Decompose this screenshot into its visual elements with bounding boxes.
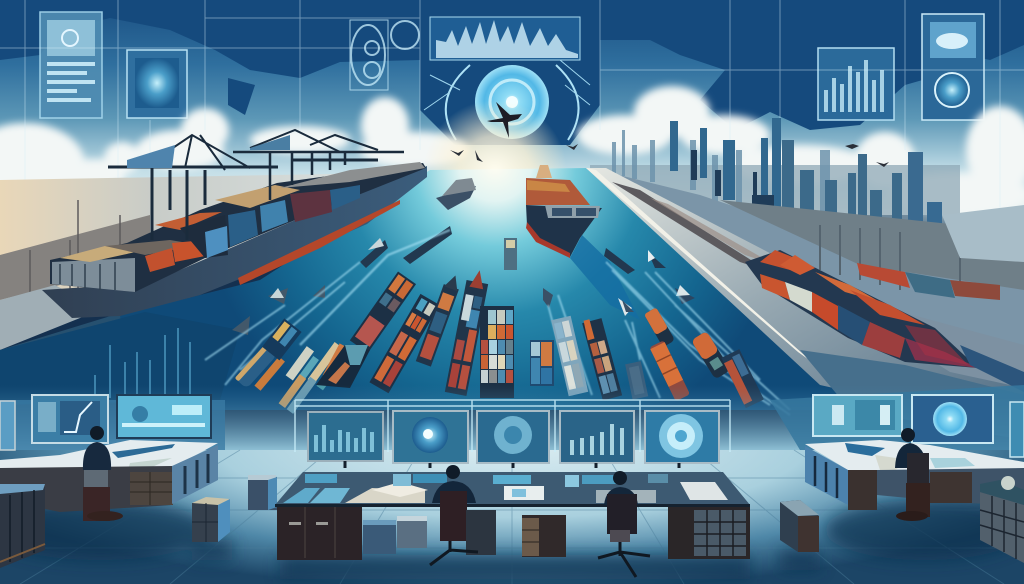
left barge: pale and teal [286, 346, 321, 386]
left monitors [0, 395, 211, 450]
ship shadow on water [570, 235, 640, 320]
left barge: blue boat [235, 344, 277, 389]
panel: central waveform chart [430, 17, 580, 60]
boat J2 [649, 340, 690, 401]
operator center right [598, 471, 650, 577]
left barge: dark and yellow [262, 318, 302, 360]
right monitors [813, 395, 1024, 457]
barge B [369, 294, 440, 393]
panel: bar chart screen right [818, 48, 894, 120]
operator left [83, 426, 123, 521]
monitor: left wide [117, 395, 211, 438]
monitor: right glowing orb [912, 395, 993, 443]
left harbour cranes [108, 130, 404, 240]
left container ship [42, 162, 427, 318]
distant cargo ship [436, 178, 476, 210]
boat J1 [644, 307, 675, 347]
left barge: tan and steel [279, 371, 317, 414]
cabinet right [980, 476, 1024, 563]
container stack F [530, 340, 554, 386]
left desk cabinet [277, 507, 362, 560]
floor [0, 450, 1024, 584]
back wall behind monitors [0, 385, 1024, 455]
left shore haze [0, 172, 440, 300]
barge D [445, 268, 490, 396]
barge I [625, 361, 648, 400]
operator right [895, 428, 930, 521]
panel: top right cloud and gauge screen [922, 14, 984, 120]
right land behind quay [590, 168, 1024, 420]
lower left dark water with data bars [0, 312, 240, 405]
container stack E [480, 306, 514, 398]
monitor: center 2 eye [393, 411, 468, 468]
right desk cabinet [668, 507, 750, 559]
monitor: center 3 eye [477, 411, 549, 468]
holographic dashboard panels [40, 12, 984, 140]
center drawer unit [522, 515, 566, 557]
center console desk [275, 465, 750, 577]
monitor: center 5 radar [645, 411, 719, 468]
birds [450, 144, 889, 167]
central container ship [526, 165, 602, 258]
panel: radar screen [127, 50, 187, 118]
scaffold yard behind containers [720, 200, 1024, 290]
monitor: right chart [813, 395, 902, 436]
clouds [0, 86, 1024, 217]
left barge: orange [323, 343, 349, 380]
barge A [350, 272, 416, 353]
floor shadows under desks [0, 500, 1024, 579]
monitor: center 1 chart [308, 412, 383, 468]
center distant ships [232, 165, 695, 335]
crate right [780, 500, 819, 552]
monitor: far left [0, 401, 15, 450]
crate near left desk [248, 475, 277, 510]
desk papers and tablets [283, 474, 728, 503]
crate left [192, 497, 230, 542]
side room walls [0, 385, 1024, 465]
monitor: left line chart [32, 395, 108, 443]
jet silhouette [487, 102, 522, 138]
barge H [582, 316, 622, 401]
barge C [416, 273, 463, 367]
barge G [551, 316, 588, 396]
operator center left [430, 465, 496, 565]
left barge: cream and teal [308, 342, 350, 390]
ship hull [42, 166, 427, 318]
glass panel grid lines [0, 0, 1024, 392]
holographic world map [0, 0, 1024, 145]
left console desk [0, 426, 277, 568]
boat K [691, 331, 731, 379]
ship containers [50, 162, 426, 292]
left barge: dark with teal deck [316, 345, 370, 388]
city skyline [590, 118, 960, 264]
water [120, 168, 860, 410]
water wake trails [205, 230, 790, 415]
sun glow on horizon [423, 100, 567, 244]
sky background [0, 0, 1024, 215]
monitor: center 4 bars [560, 411, 634, 468]
cabinet left [0, 484, 45, 568]
container stacks on quay [745, 250, 1024, 392]
center monitors [308, 411, 719, 468]
haze right of skyline [942, 205, 1024, 262]
left dock structures [0, 200, 180, 400]
left barge: orange strip [254, 356, 285, 391]
small vessels [232, 226, 695, 335]
icon: central holographic orb [424, 60, 590, 140]
right console desk [805, 428, 1024, 563]
boat L [721, 349, 764, 408]
panel: circular gauges [350, 20, 419, 90]
right quay with rail [586, 168, 1024, 440]
glass frame above center monitors [295, 400, 730, 452]
boxes under desk [363, 516, 427, 554]
container barge rows [235, 268, 764, 414]
monitor: far right [1010, 402, 1024, 457]
panel: top left data screen [40, 12, 102, 118]
